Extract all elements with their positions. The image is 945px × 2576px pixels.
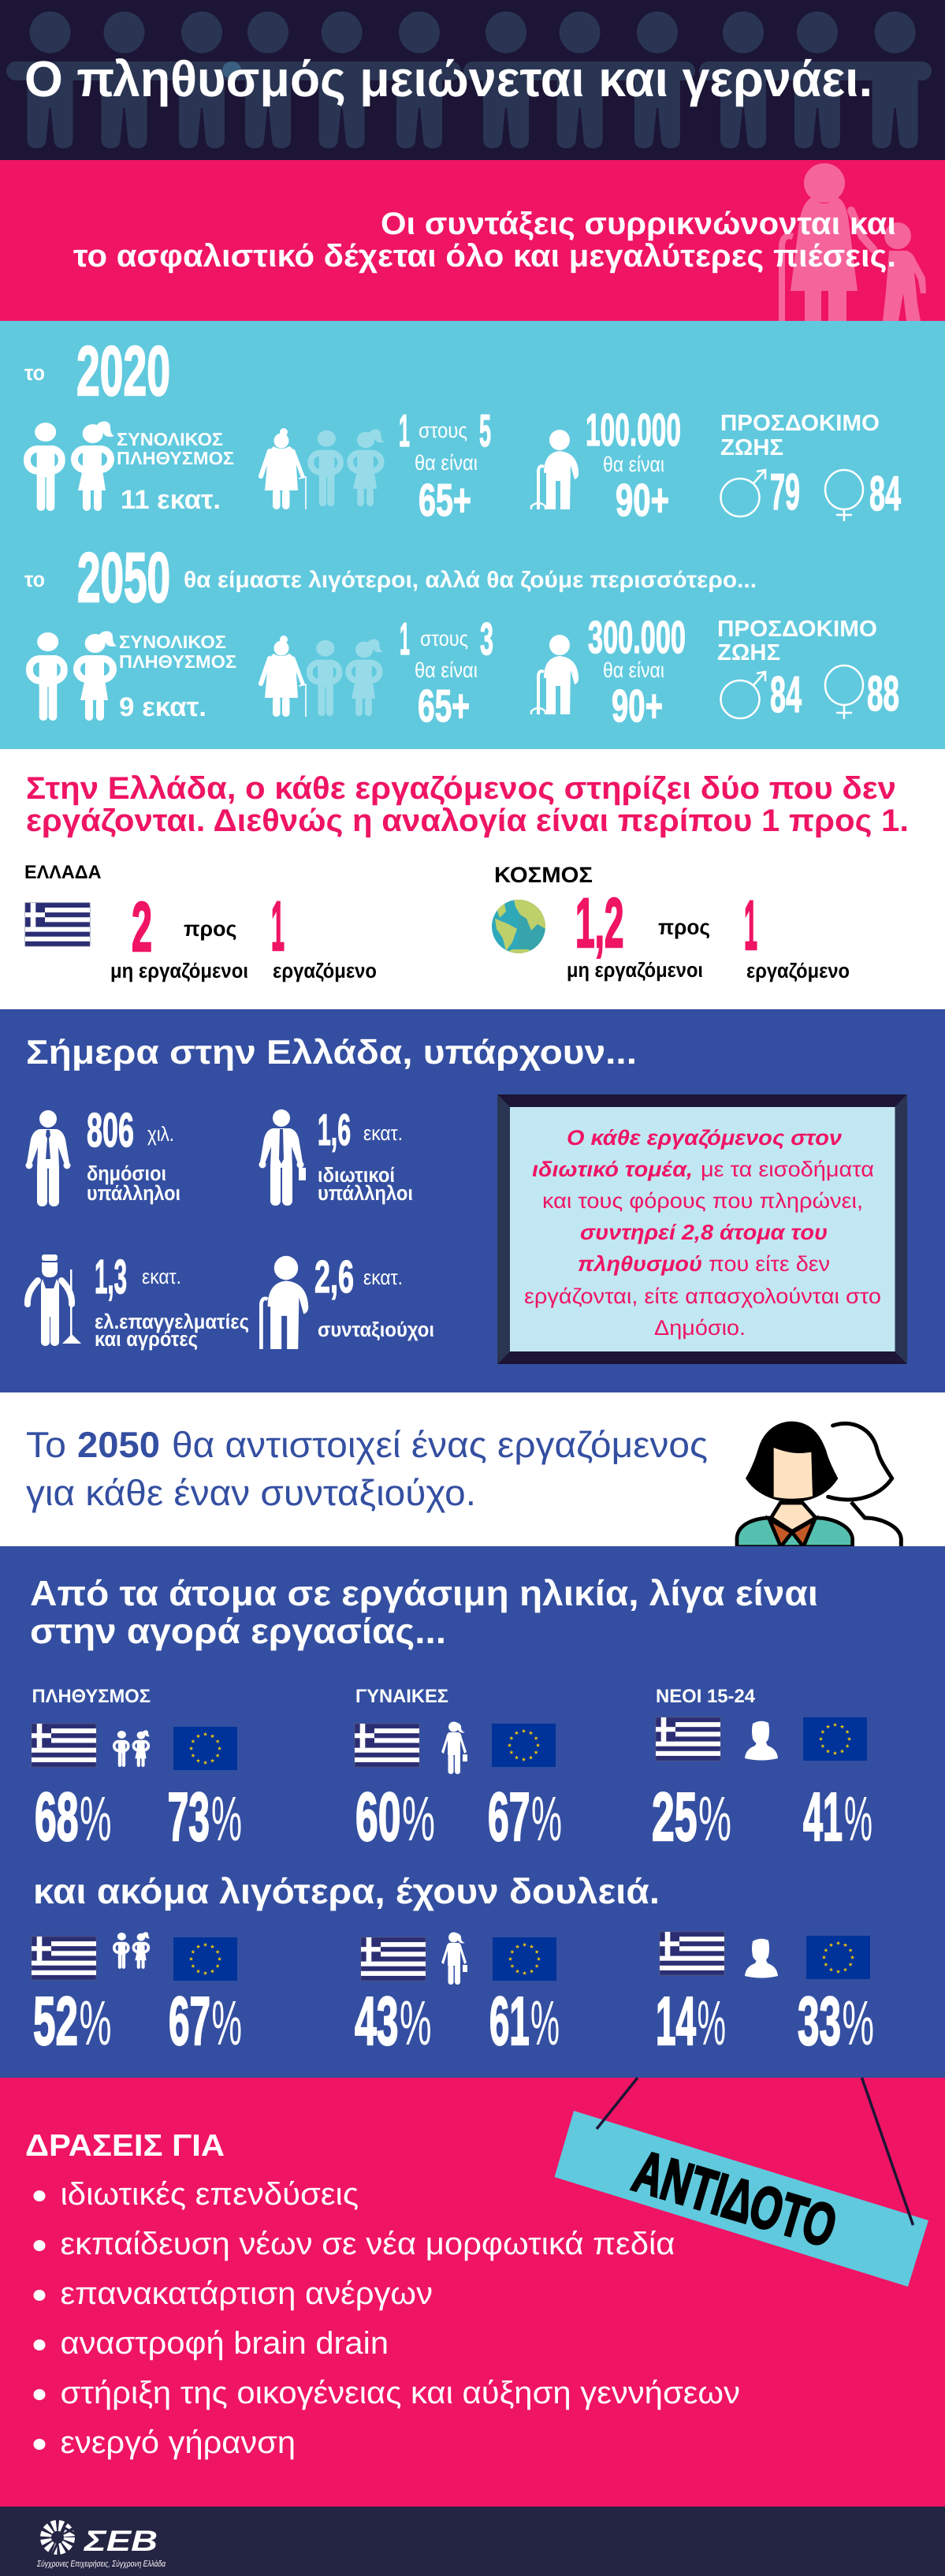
life expectancy 2020: 79	[770, 463, 800, 520]
stat: 1 in 5 over 65: στους	[419, 419, 467, 442]
percentages row 1: %	[402, 1784, 435, 1854]
heading: working age: Από τα άτομα σε εργάσιμη ηλικία, λίγα είναι	[30, 1573, 818, 1613]
panel: employment today	[0, 1009, 945, 1392]
action list: επανακατάρτιση ανέργων	[60, 2276, 433, 2311]
stat: public employees: δημόσιοι	[87, 1161, 166, 1185]
heading: employed: και ακόμα λιγότερα, έχουν δουλειά.	[33, 1871, 660, 1911]
stat: 1 in 5 over 65: 65+	[419, 475, 471, 526]
hanging sign: antidote	[555, 2078, 928, 2287]
icons row 1: women	[355, 1722, 556, 1774]
icons row 2: youth	[660, 1932, 870, 1979]
callout: framed note: με τα εισοδήματα	[701, 1158, 874, 1181]
icon: old man with cane 2020	[531, 430, 579, 509]
callout: framed note: πληθυσμού	[578, 1252, 702, 1276]
stat: freelancers and farmers: ελ.επαγγελματίες	[95, 1310, 249, 1333]
stat: freelancers and farmers	[95, 1250, 249, 1351]
icon: boy and girl 2050	[30, 631, 117, 721]
stat: private employees: υπάλληλοι	[318, 1181, 413, 1205]
statement text	[26, 1424, 708, 1513]
heading: support ratio: Στην Ελλάδα, ο κάθε εργαζόμενος στηρίζει δύο που δεν	[26, 771, 896, 806]
callout: framed note: που είτε δεν	[709, 1252, 830, 1276]
icon: old woman with two people 2020	[261, 428, 385, 509]
panel: workers ratio	[25, 775, 906, 982]
heading: 2050: 2050	[77, 538, 170, 617]
stat: freelancers and farmers: εκατ.	[142, 1265, 181, 1288]
percentages row 2: %	[842, 1988, 874, 2058]
ratio: Greece: μη εργαζόμενοι	[110, 959, 248, 982]
logo: SEV: ΣΕΒ	[84, 2525, 158, 2557]
life expectancy 2050: 84	[770, 665, 802, 723]
callout: framed note: Ο κάθε εργαζόμενος στον	[567, 1126, 842, 1150]
action list: εκπαίδευση νέων σε νέα μορφωτικά πεδία	[60, 2227, 675, 2261]
column label: women: ΓΥΝΑΙΚΕΣ	[355, 1686, 448, 1707]
stat: 1 in 3 over 65: 3	[480, 613, 493, 665]
icon: civil servant	[25, 1110, 71, 1206]
ratio: Greece: 1	[271, 886, 285, 965]
percentages row 2: 61	[489, 1983, 530, 2060]
stat: 1 in 5 over 65	[399, 405, 491, 526]
icons row 1: youth	[656, 1717, 867, 1761]
percentages row 2: 67	[169, 1983, 210, 2060]
panel: title banner	[0, 0, 945, 160]
ratio: World: προς	[658, 915, 710, 939]
icon: private employee	[259, 1109, 306, 1206]
callout: framed note: ιδιωτικό τομέα,	[532, 1158, 693, 1181]
stat: freelancers and farmers: και αγρότες	[95, 1327, 198, 1351]
percentages row 1: 67	[488, 1779, 530, 1855]
percentages row 1: %	[844, 1784, 872, 1854]
statement text: για κάθε έναν συνταξιούχο.	[26, 1472, 476, 1513]
ratio: Greece	[110, 886, 377, 982]
callout: framed note: συντηρεί 2,8 άτομα του	[580, 1221, 828, 1244]
percentages row 2: 52	[33, 1983, 78, 2060]
life expectancy 2020: 84	[869, 467, 901, 521]
icon: woman with shadow figure	[737, 1422, 901, 1547]
total population 2020	[117, 429, 234, 515]
stat: 100,000 over 90: θα είναι	[603, 453, 664, 476]
stat: pensioners: συνταξιούχοι	[318, 1318, 434, 1341]
icon: old woman with two people 2050	[261, 636, 383, 717]
percentages row 1: 25	[652, 1779, 698, 1855]
life expectancy 2020: ΖΩΗΣ	[720, 435, 783, 460]
callout: framed note	[497, 1094, 907, 1364]
percentages row 2: 14	[656, 1983, 696, 2060]
stat: 100,000 over 90: 90+	[616, 475, 669, 526]
icon: pensioner	[261, 1256, 308, 1349]
life expectancy 2050	[717, 617, 899, 723]
percentages row 2: 33	[798, 1983, 841, 2060]
percentages row 1: %	[531, 1784, 562, 1854]
action list: στήριξη της οικογένειας και αύξηση γεννήσεων	[60, 2376, 740, 2410]
stat: pensioners: 2,6	[314, 1251, 354, 1303]
statement text: 2050	[77, 1424, 160, 1465]
stat: 300,000 over 90	[588, 612, 686, 732]
ratio: World: εργαζόμενο	[746, 959, 850, 982]
subheading text: το ασφαλιστικό δέχεται όλο και μεγαλύτερες πιέσεις.	[73, 239, 896, 274]
stat: 1 in 5 over 65: 1	[399, 405, 410, 457]
percentages row 1: 41	[803, 1779, 843, 1855]
total population 2050	[119, 632, 236, 722]
hanging sign: antidote: ΑΝΤΙΔΟΤΟ	[626, 2138, 843, 2260]
percentages row 1: 73	[168, 1779, 210, 1855]
heading: working age: στην αγορά εργασίας...	[30, 1611, 446, 1651]
ratio: Greece: προς	[184, 917, 236, 941]
background crowd silhouettes	[6, 11, 932, 148]
total population 2050: 9 εκατ.	[119, 692, 206, 722]
heading: 2020: 2020	[76, 331, 170, 410]
panel: actions	[0, 2078, 945, 2507]
stat: 100,000 over 90: 100.000	[586, 404, 681, 456]
subheading text: Οι συντάξεις συρρικνώνονται και	[381, 207, 896, 241]
stat: 1 in 5 over 65: θα είναι	[415, 451, 478, 475]
icon: boy and girl 2020	[27, 421, 114, 511]
stat: 1 in 3 over 65: θα είναι	[415, 658, 478, 682]
ratio: World: μη εργαζόμενοι	[567, 958, 703, 982]
percentages row 1	[35, 1779, 872, 1855]
heading: 2020	[24, 331, 170, 410]
panel: 2050 pensioner ratio	[0, 1392, 945, 1547]
panel: demographics 2020 and 2050	[0, 321, 945, 749]
percentages row 2: %	[400, 1988, 432, 2058]
percentages row 2: %	[530, 1988, 560, 2058]
icon: grandmother and child silhouette	[782, 163, 926, 321]
heading: support ratio	[26, 771, 909, 838]
statement text: Το	[26, 1424, 66, 1465]
heading: Σήμερα στην Ελλάδα, υπάρχουν...	[26, 1034, 637, 1072]
stat: 100,000 over 90	[586, 404, 681, 526]
panel: demographics 2020 and 2050: 5	[479, 405, 491, 457]
life expectancy 2050: ΠΡΟΣΔΟΚΙΜΟ	[717, 617, 877, 642]
heading: 2050: το	[24, 568, 45, 591]
heading: 2050	[24, 538, 757, 617]
stat: public employees: χιλ.	[147, 1122, 174, 1146]
stat: pensioners: εκατ.	[363, 1266, 403, 1289]
stat: 300,000 over 90: 90+	[612, 680, 663, 732]
stat: private employees: ιδιωτικοί	[318, 1163, 395, 1187]
stat: 1 in 3 over 65: 1	[400, 613, 410, 665]
stat: freelancers and farmers: 1,3	[95, 1250, 127, 1303]
panel: labour market	[0, 1546, 945, 2078]
action list	[33, 2177, 740, 2460]
percentages row 1: 60	[355, 1779, 400, 1855]
life expectancy 2050: ΖΩΗΣ	[717, 640, 780, 665]
ratio: Greece: εργαζόμενο	[273, 959, 377, 982]
percentages row 2: %	[79, 1988, 112, 2058]
column label: youth: ΝΕΟΙ 15-24	[656, 1686, 756, 1707]
callout: framed note: και τους φόρους που πληρώνει,	[542, 1189, 863, 1213]
stat: private employees: εκατ.	[363, 1121, 403, 1145]
percentages row 1: 68	[35, 1779, 79, 1855]
label: Greece: ΕΛΛΑΔΑ	[24, 862, 101, 883]
label: World: ΚΟΣΜΟΣ	[494, 863, 593, 887]
stat: private employees: 1,6	[318, 1105, 351, 1154]
stat: 1 in 3 over 65	[400, 613, 493, 732]
total population 2020: 11 εκατ.	[121, 485, 221, 515]
percentages row 1: %	[698, 1784, 731, 1854]
stat: public employees: 806	[87, 1103, 134, 1157]
action list: αναστροφή brain drain	[60, 2326, 389, 2361]
icon: worker with broom	[28, 1254, 81, 1346]
stat: private employees	[318, 1105, 413, 1205]
ratio: Greece: 2	[132, 887, 152, 966]
statement text: θα αντιστοιχεί ένας εργαζόμενος	[172, 1424, 708, 1465]
total population 2050: ΠΛΗΘΥΣΜΟΣ	[119, 651, 236, 672]
heading: support ratio: εργάζονται. Διεθνώς η αναλογία είναι περίπου 1 προς 1.	[26, 803, 909, 838]
ratio: World: 1,2	[575, 883, 624, 962]
percentages row 2: %	[697, 1988, 726, 2058]
callout: framed note: Δημόσιο.	[654, 1316, 746, 1340]
stat: public employees: υπάλληλοι	[87, 1181, 180, 1205]
callout: framed note: εργάζονται, είτε απασχολούνται στο	[524, 1284, 881, 1308]
icons row 1: population	[32, 1724, 237, 1770]
life expectancy 2020	[720, 411, 901, 521]
percentages row 2: 43	[355, 1983, 399, 2060]
icons row 2: women	[361, 1932, 556, 1985]
total population 2020: ΣΥΝΟΛΙΚΟΣ	[117, 429, 223, 449]
icon: globe	[492, 900, 545, 953]
percentages row 2: %	[211, 1988, 242, 2058]
logo: SEV: Σύγχρονες Επιχειρήσεις, Σύγχρονη Ελλάδα	[36, 2559, 166, 2569]
panel: footer	[0, 2507, 945, 2576]
total population 2020: ΠΛΗΘΥΣΜΟΣ	[117, 448, 234, 468]
stat: 1 in 3 over 65: στους	[420, 627, 468, 651]
panel: shrinking pensions	[0, 160, 945, 321]
action list: ενεργό γήρανση	[60, 2425, 296, 2460]
stat: 300,000 over 90: 300.000	[588, 612, 686, 663]
percentages row 1: %	[80, 1784, 112, 1854]
stat: pensioners	[314, 1251, 434, 1341]
icon: old man with cane 2050	[531, 635, 579, 714]
ratio: World: 1	[744, 885, 757, 964]
action list: ιδιωτικές επενδύσεις	[60, 2177, 359, 2212]
stat: public employees	[87, 1103, 180, 1205]
heading: 2020: το	[24, 361, 45, 385]
stat: 1 in 3 over 65: 65+	[418, 680, 470, 732]
percentages row 1: %	[211, 1784, 242, 1854]
heading: actions: ΔΡΑΣΕΙΣ ΓΙΑ	[25, 2129, 225, 2163]
ratio: World	[567, 883, 850, 982]
icons row 2: population	[32, 1932, 237, 1981]
heading: 2050: θα είμαστε λιγότεροι, αλλά θα ζούμε περισσότερο...	[184, 568, 757, 593]
heading: working age	[30, 1573, 818, 1651]
total population 2050: ΣΥΝΟΛΙΚΟΣ	[119, 632, 226, 652]
life expectancy 2050: 88	[867, 666, 899, 721]
logo: SEV	[36, 2525, 166, 2569]
subheading text	[73, 207, 896, 274]
life expectancy 2020: ΠΡΟΣΔΟΚΙΜΟ	[720, 411, 880, 436]
percentages row 2	[33, 1983, 874, 2060]
title: Ο πληθυσμός μειώνεται και γερνάει.	[24, 50, 872, 107]
icon: Greek flag	[25, 903, 90, 946]
stat: 300,000 over 90: θα είναι	[603, 658, 664, 682]
column label: population: ΠΛΗΘΥΣΜΟΣ	[32, 1686, 151, 1707]
